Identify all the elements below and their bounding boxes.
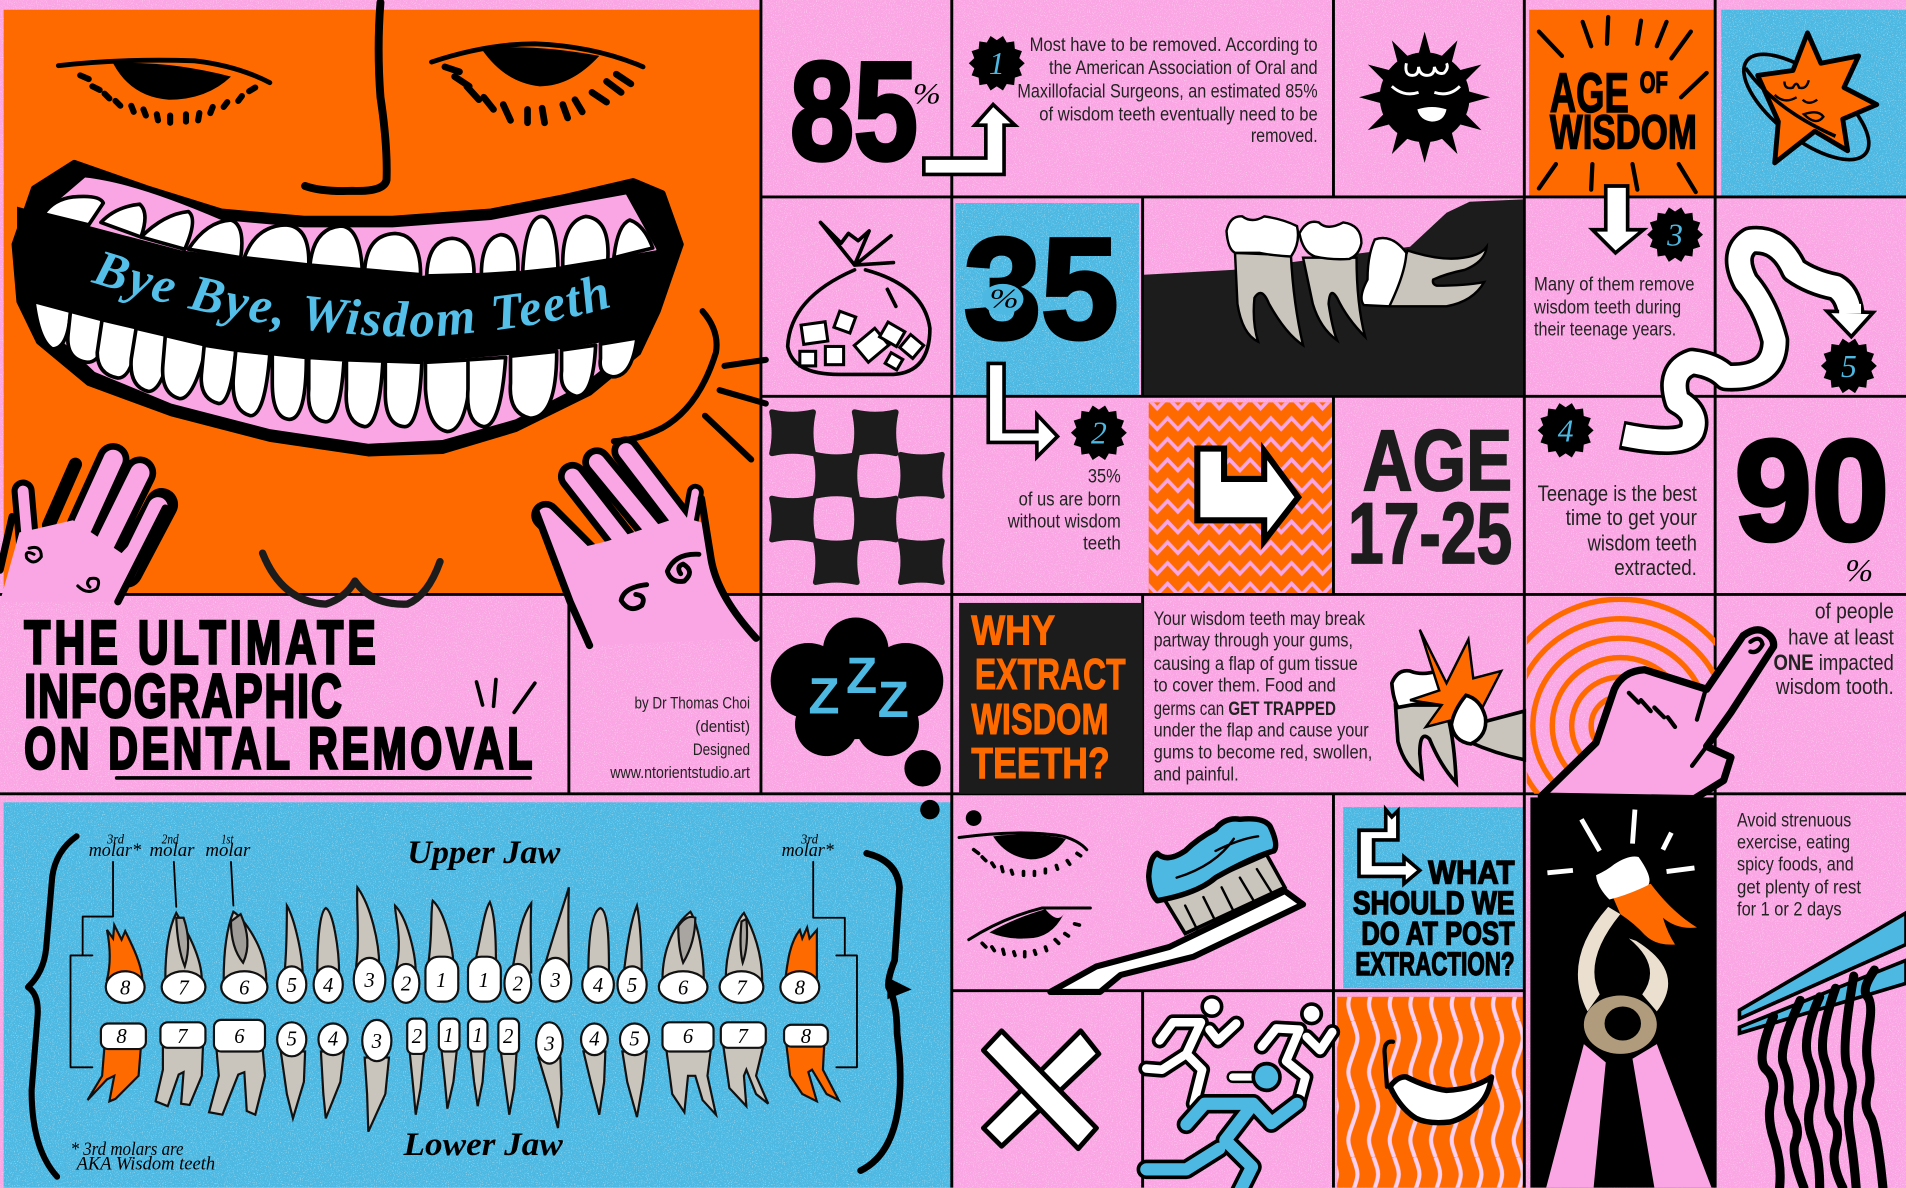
icon: upper tired eye bbox=[959, 833, 1087, 875]
panel: wavy stripes background bbox=[1337, 997, 1524, 1188]
label: lower jaw: Lower Jaw bbox=[402, 1127, 563, 1163]
text: fact 2 bbox=[1007, 466, 1121, 554]
percent sign for 90: % bbox=[1845, 553, 1873, 588]
panel: orange age of wisdom background bbox=[1529, 10, 1715, 197]
icon: lower tired eye bbox=[969, 908, 1090, 957]
runner: white right bbox=[1262, 1004, 1332, 1104]
panel: blue star background bbox=[1721, 10, 1906, 197]
icon: toothbrush bbox=[1050, 819, 1303, 992]
panel: why extract wisdom teeth: WISDOM bbox=[971, 695, 1109, 744]
badge: number 1: 1 bbox=[989, 46, 1005, 81]
labels: molars: 2nd bbox=[162, 832, 179, 847]
lower tooth numbers: 7 bbox=[177, 1026, 189, 1048]
text: why explanation: under the flap and cause your bbox=[1154, 720, 1369, 742]
upper tooth numbers: 5 bbox=[627, 975, 637, 997]
panel: byline: by Dr Thomas Choi bbox=[635, 694, 750, 713]
icon: chili pepper bbox=[1385, 1042, 1491, 1123]
upper tooth numbers: 2 bbox=[513, 974, 523, 996]
arrow: jagged L arrow bbox=[1359, 810, 1420, 884]
text: post extraction advice: spicy foods, and bbox=[1737, 853, 1854, 875]
icon: right eye bbox=[432, 44, 643, 123]
icon: white X bbox=[983, 1031, 1099, 1149]
badge: number 5: 5 bbox=[1841, 349, 1857, 384]
text: fact 4: wisdom teeth bbox=[1587, 531, 1697, 556]
icon: running figures bbox=[1146, 997, 1332, 1188]
text: post extraction advice bbox=[1737, 810, 1862, 920]
heading: WISDOM bbox=[1550, 105, 1697, 159]
wisdom teeth lower roots bbox=[88, 1045, 839, 1101]
badge: number 2: 2 bbox=[1091, 416, 1107, 451]
lower teeth roots bbox=[156, 1045, 768, 1132]
panel: tired eyes and toothbrush bbox=[959, 810, 1303, 992]
text: fact 1: of wisdom teeth eventually need to be bbox=[1039, 103, 1318, 125]
lower crowns bbox=[101, 1019, 828, 1064]
upper tooth numbers: 8 bbox=[120, 977, 131, 999]
text: why explanation: germs can GET TRAPPED bbox=[1154, 698, 1336, 720]
upper tooth numbers: 6 bbox=[239, 977, 250, 999]
wisdom teeth upper roots bbox=[107, 925, 817, 980]
illustration: grinning mouth bbox=[12, 160, 684, 456]
note: third molars: * 3rd molars are bbox=[71, 1139, 184, 1160]
icon: sleep cloud: Z bbox=[808, 668, 840, 725]
text: post extraction advice: exercise, eating bbox=[1737, 831, 1850, 853]
upper tooth numbers: 3 bbox=[549, 970, 561, 992]
text: post extraction advice: Avoid strenuous bbox=[1737, 810, 1852, 832]
panel: byline: (dentist) bbox=[695, 717, 750, 736]
text: why explanation: to cover them. Food and bbox=[1154, 675, 1336, 697]
panel: 85 percent bbox=[790, 32, 941, 189]
brace: right bbox=[861, 800, 940, 1171]
number 85: 85 bbox=[790, 32, 918, 189]
labels: molars: 3rd bbox=[800, 832, 818, 847]
upper tooth numbers bbox=[120, 970, 806, 999]
icon: chin bbox=[263, 553, 440, 604]
lower tooth numbers: 1 bbox=[443, 1025, 454, 1047]
text: why explanation: Your wisdom teeth may break bbox=[1154, 608, 1365, 630]
text: post extraction advice: get plenty of rest bbox=[1737, 876, 1862, 898]
heading: DO AT POST bbox=[1361, 915, 1515, 952]
badge: number 1 bbox=[969, 36, 1025, 90]
illustration: impacted tooth with explosion bbox=[1392, 630, 1524, 783]
icon: orange star with orbit bbox=[1727, 33, 1885, 178]
text: of people stat: of people bbox=[1815, 599, 1894, 624]
number 90: 90 bbox=[1735, 411, 1889, 571]
panel: blue 35 background bbox=[955, 203, 1139, 396]
text: fact 1: Most have to be removed. According to bbox=[1030, 34, 1318, 56]
text: of people stat bbox=[1774, 599, 1894, 699]
text: of people stat: ONE impacted bbox=[1774, 650, 1894, 675]
upper teeth roots bbox=[165, 887, 762, 980]
labels: molars bbox=[89, 832, 834, 861]
underline and tick marks bbox=[117, 680, 535, 778]
text: fact 3: Many of them remove bbox=[1534, 274, 1694, 296]
panel: bag of teeth bbox=[788, 222, 930, 374]
labels: molars: molar* bbox=[89, 840, 141, 861]
text: age 17-25 bbox=[1348, 413, 1512, 582]
text: why explanation: causing a flap of gum tissue bbox=[1154, 653, 1358, 675]
lower tooth numbers bbox=[116, 1025, 812, 1055]
badge: number 3 bbox=[1647, 207, 1703, 262]
rays bbox=[1547, 810, 1694, 873]
labels: molars: 1st bbox=[221, 832, 234, 847]
text: fact 2: without wisdom bbox=[1007, 511, 1121, 533]
labels: molars: 3rd bbox=[106, 832, 124, 847]
panel: why extract wisdom teeth: TEETH? bbox=[971, 739, 1110, 788]
text: fact 4: extracted. bbox=[1614, 555, 1697, 580]
icon: sleep cloud bbox=[771, 618, 943, 786]
pliers jaws bbox=[1578, 907, 1668, 1011]
lower tooth numbers: 5 bbox=[287, 1028, 297, 1050]
icon: left eye bbox=[58, 60, 270, 123]
text: why explanation: gums to become red, swollen, bbox=[1154, 742, 1372, 764]
title text: INFOGRAPHIC bbox=[24, 664, 342, 731]
arrow: age of wisdom to fact 3 bbox=[1592, 186, 1643, 253]
text: fact 2: teeth bbox=[1083, 532, 1121, 554]
illustration: grinning mouth: Bye Bye, Wisdom Teeth bbox=[90, 252, 610, 337]
lower tooth numbers: 6 bbox=[234, 1026, 245, 1048]
text: age 17-25: AGE bbox=[1363, 413, 1512, 509]
percent sign: % bbox=[913, 78, 941, 110]
heading: EXTRACTION? bbox=[1355, 945, 1515, 982]
heading: AGE bbox=[1550, 61, 1629, 124]
labels: molars: molar* bbox=[782, 840, 834, 861]
text: post extraction advice: for 1 or 2 days bbox=[1737, 898, 1842, 920]
panel: orange face background bbox=[4, 10, 761, 594]
lower tooth numbers: 8 bbox=[116, 1026, 127, 1048]
panel: pliers pulling tooth bbox=[1530, 797, 1715, 1188]
text: why explanation: partway through your gums, bbox=[1154, 630, 1353, 652]
text: fact 1: the American Association of Oral and bbox=[1049, 57, 1318, 79]
icon: dot bbox=[966, 810, 982, 826]
text: why explanation bbox=[1154, 608, 1372, 785]
panel: why extract wisdom teeth bbox=[959, 603, 1143, 794]
icon: right hand bbox=[536, 451, 756, 645]
lower tooth numbers: 3 bbox=[543, 1033, 555, 1055]
lower tooth numbers: 4 bbox=[589, 1028, 600, 1050]
lower tooth numbers: 2 bbox=[412, 1026, 422, 1048]
icon: pointing hand bbox=[1541, 630, 1774, 799]
lower tooth numbers: 4 bbox=[328, 1028, 338, 1050]
pliers pivot bbox=[1584, 996, 1657, 1054]
heading bbox=[1353, 854, 1515, 982]
panel: what should we do bbox=[1353, 810, 1515, 982]
note: third molars: AKA Wisdom teeth bbox=[75, 1153, 215, 1174]
extracted tooth bbox=[1596, 857, 1697, 945]
brace: left bbox=[28, 836, 77, 1177]
text: fact 4: time to get your bbox=[1566, 505, 1697, 530]
lower tooth numbers: 5 bbox=[629, 1028, 640, 1050]
text: fact 3 bbox=[1533, 274, 1694, 341]
badge: number 2 bbox=[1071, 406, 1127, 460]
badge: number 5 bbox=[1821, 339, 1877, 393]
lower tooth numbers: 3 bbox=[371, 1031, 382, 1053]
upper tooth numbers: 8 bbox=[795, 977, 806, 999]
upper teeth bbox=[44, 196, 653, 276]
panel: byline: www.ntorientstudio.art bbox=[609, 763, 750, 782]
text: fact 3: wisdom teeth during bbox=[1533, 297, 1681, 319]
lower tooth numbers: 7 bbox=[738, 1026, 750, 1048]
title text bbox=[24, 610, 532, 781]
panel: tooth chart bbox=[28, 800, 940, 1177]
panel: molars in jaw bbox=[1144, 199, 1523, 395]
lower teeth bbox=[34, 301, 637, 432]
illustration: checker pattern bbox=[772, 412, 942, 582]
text: fact 1: Maxillofacial Surgeons, an estimated 85% bbox=[1017, 80, 1318, 102]
text: bye bye wisdom teeth bbox=[91, 282, 604, 336]
panel: why extract wisdom teeth: WHY bbox=[971, 607, 1055, 653]
illustration: concentric rings bbox=[1526, 596, 1716, 794]
number 35: 35 bbox=[964, 209, 1118, 369]
cutout and percent sign for 35: % bbox=[989, 284, 1019, 315]
panel: why extract wisdom teeth: EXTRACT bbox=[975, 650, 1126, 699]
icon: cheek crease and pain lines bbox=[614, 311, 766, 459]
upper crowns bbox=[106, 957, 819, 1003]
rays bbox=[1539, 17, 1707, 192]
badge: number 4: 4 bbox=[1558, 413, 1574, 448]
upper tooth numbers: 3 bbox=[363, 970, 375, 992]
upper tooth numbers: 6 bbox=[678, 977, 689, 999]
icon: sleep cloud: Z bbox=[878, 671, 909, 728]
lower tooth numbers: 2 bbox=[503, 1026, 513, 1048]
label: upper jaw: Upper Jaw bbox=[407, 835, 560, 871]
black band inside mouth bbox=[17, 207, 671, 362]
arrow: 35 to fact 2 bbox=[988, 363, 1058, 457]
panel: blue what should we do background bbox=[1343, 807, 1524, 988]
upper tooth numbers: 4 bbox=[323, 975, 333, 997]
panel: byline: Designed bbox=[693, 740, 750, 759]
cutout and percent sign for 35 bbox=[982, 284, 1024, 315]
text: fact 1: removed. bbox=[1251, 125, 1318, 147]
icon: nose bbox=[305, 2, 387, 191]
labels: molars: molar bbox=[150, 840, 195, 861]
runner: blue bbox=[1146, 1064, 1297, 1188]
heading: WHAT bbox=[1428, 854, 1515, 891]
title text: ON DENTAL REMOVAL bbox=[24, 715, 532, 781]
panel: byline bbox=[609, 694, 750, 782]
text: fact 4 bbox=[1538, 481, 1697, 580]
badge: number 3: 3 bbox=[1666, 218, 1683, 253]
lower tooth numbers: 1 bbox=[473, 1025, 483, 1047]
note: third molars bbox=[71, 1139, 215, 1174]
upper tooth numbers: 1 bbox=[479, 970, 489, 992]
upper tooth numbers: 4 bbox=[593, 975, 603, 997]
panel: blue tooth chart background bbox=[4, 802, 952, 1188]
panel: age of wisdom bbox=[1539, 17, 1707, 192]
text: fact 4: Teenage is the best bbox=[1538, 481, 1697, 506]
arrow: wavy arrow to fact 5 bbox=[1622, 240, 1873, 440]
leader lines bbox=[71, 862, 857, 1067]
labels: molars: molar bbox=[205, 840, 251, 861]
text: age 17-25: 17-25 bbox=[1348, 486, 1512, 582]
text: why explanation: and painful. bbox=[1154, 763, 1239, 785]
heading: OF bbox=[1640, 67, 1668, 99]
upper tooth numbers: 7 bbox=[178, 977, 190, 999]
badge: number 4 bbox=[1538, 403, 1594, 458]
pliers handles bbox=[1546, 1044, 1712, 1188]
upper tooth numbers: 2 bbox=[401, 974, 411, 996]
title text: THE ULTIMATE bbox=[24, 610, 376, 678]
icon: black sun with sleeping face bbox=[1359, 32, 1490, 163]
arrow: to fact 1 bbox=[924, 105, 1015, 174]
upper tooth numbers: 1 bbox=[436, 970, 446, 992]
panel: zigzag background bbox=[1149, 402, 1333, 594]
heading bbox=[1550, 61, 1697, 159]
icon: left hand bbox=[0, 459, 165, 602]
text: fact 2: of us are born bbox=[1019, 489, 1121, 511]
text: fact 1 bbox=[1017, 34, 1318, 147]
icon: sleep cloud: Z bbox=[846, 647, 877, 704]
heading: SHOULD WE bbox=[1353, 884, 1515, 921]
text: fact 2: 35% bbox=[1088, 466, 1121, 488]
arrow: white arrow on zigzag bbox=[1197, 449, 1298, 541]
illustration: floss strands bbox=[1739, 913, 1906, 1188]
panel: big smiling face bbox=[12, 0, 769, 462]
runner: white left bbox=[1146, 997, 1236, 1104]
lower tooth numbers: 6 bbox=[683, 1026, 694, 1048]
text: fact 3: their teenage years. bbox=[1534, 319, 1676, 341]
upper tooth numbers: 7 bbox=[736, 977, 748, 999]
upper tooth numbers: 5 bbox=[287, 975, 297, 997]
panel: title bbox=[24, 610, 535, 781]
lower tooth numbers: 8 bbox=[801, 1026, 812, 1048]
